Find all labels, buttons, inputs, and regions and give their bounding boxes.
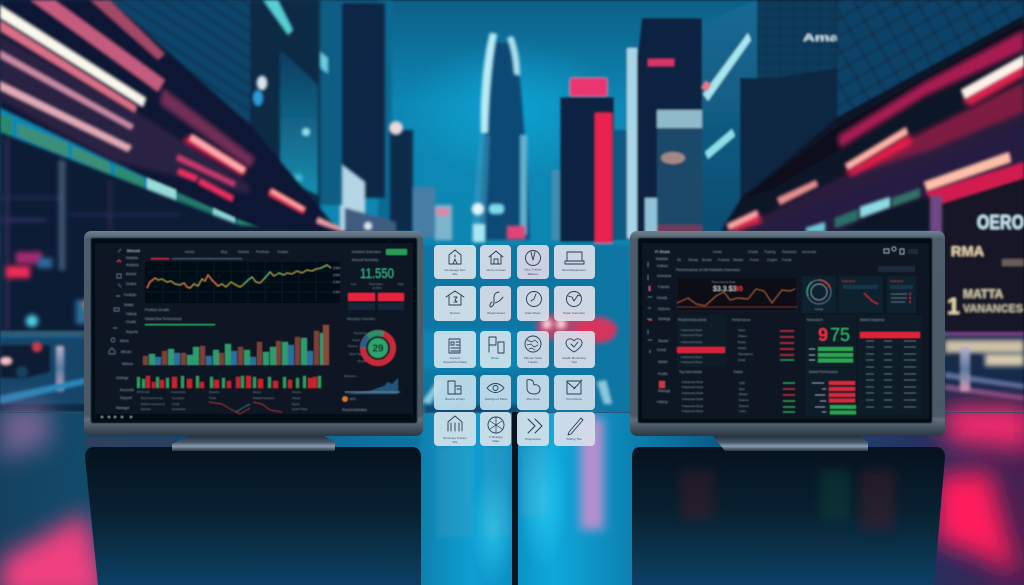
icon tile: clock pin [517, 245, 549, 279]
left panel heading: Market Bar Performance [145, 317, 182, 321]
left lower data tables: Market Indicators [253, 396, 275, 400]
right line chart panel: Price Volume Data [712, 280, 736, 284]
right top navigation: Crypto [767, 258, 777, 262]
right table panel: positions: Instrument Stock [681, 360, 703, 364]
left lower data tables: BTC/USD [137, 390, 149, 394]
right table panel: holdings: Credit [738, 358, 746, 362]
left far towers [340, 0, 452, 240]
green sign band [0, 114, 262, 228]
right sidebar navigation: Profile [658, 372, 668, 376]
right table panel: holdings: Performance [732, 318, 750, 322]
left taskbar icons [101, 416, 132, 418]
icon tile: city home [434, 412, 476, 446]
icon tile: files: Review Library [445, 397, 465, 401]
left lower data tables: Quant Trade [292, 407, 308, 411]
right sidebar navigation: Details [657, 296, 668, 300]
right table panel: lower left: Top Instruments [679, 370, 702, 374]
icon tile: heart: Tool [571, 360, 577, 364]
right table panel: positions: Instrument Stock [681, 340, 703, 344]
left volume bar chart [137, 376, 321, 388]
icon tile: curved shape [517, 375, 549, 410]
right stand [712, 435, 868, 451]
icon tile: laptop: Board Equipment [562, 268, 586, 272]
icon tile: clock pin: Hour Tracker [524, 268, 542, 272]
left lower data tables: Derivatives [172, 407, 186, 411]
icon tile: check envelope: Proof Store [566, 397, 582, 401]
right table panel: lower middle: Options [739, 404, 749, 408]
right table panel: positions: Instrument Stock [681, 328, 703, 332]
left stand [172, 435, 335, 451]
right sidebar navigation: Fi Shark [655, 249, 670, 254]
right table panel: lower left: Instrument Stock [682, 404, 704, 408]
right table panel: lower left: Instrument Stock [682, 409, 704, 413]
streak: light pink [0, 81, 132, 152]
left storefront [0, 132, 350, 335]
right headline value panel: Momentum [807, 318, 823, 322]
icon tile: phone and page: Photo [491, 356, 499, 360]
right table panel: holdings: Alternatives [738, 352, 753, 356]
illuminated storefront sign: VANANCES [963, 303, 1023, 315]
left sidebar navigation: History [126, 312, 137, 316]
icon tile: knowledge globe: Tracker [528, 360, 538, 364]
left sidebar navigation: Support [120, 396, 132, 400]
left upper building [110, 0, 250, 125]
left screen [91, 238, 417, 423]
red lit tower [552, 78, 627, 243]
right table panel: lower left: Instrument Stock [682, 391, 704, 395]
right monitor reflection [632, 447, 945, 585]
left top navigation: Market [238, 250, 249, 254]
right table panel: positions: Instrument Stock [681, 333, 703, 337]
right top mini panels: Highlights [890, 279, 904, 283]
right top navigation: All [677, 258, 681, 262]
icon tile: eye: Settings of Place [485, 397, 508, 401]
left mini area chart: Allocation [344, 374, 357, 378]
left donut chart: Crypto [352, 338, 361, 342]
right table panel: holdings [730, 315, 802, 367]
icon tile: brain globe: Maps [492, 439, 500, 443]
icon tile: home person: Homepage Item [444, 268, 466, 272]
icon tile: house with arrow [434, 286, 476, 321]
left facade with neon streaks [0, 0, 342, 232]
left mini area chart: BTC [350, 397, 357, 401]
left monitor reflection [85, 447, 421, 585]
left headline value: 11.550 [360, 265, 394, 281]
right table panel: lower left: Instrument Stock [682, 397, 704, 401]
icon tile: house with arrow: Review [450, 311, 461, 315]
left account panel: Total Value [369, 282, 383, 286]
right sidebar navigation: Credit [657, 348, 666, 352]
central glass tower [472, 33, 530, 242]
right top navigation: Charts [748, 250, 758, 254]
left sidebar navigation: Charts [126, 320, 136, 324]
left lower data tables: Credit [172, 402, 180, 406]
icon tile grid [434, 245, 595, 446]
red neon tubes [183, 135, 246, 176]
right glass building: Amal [803, 33, 843, 44]
right facade with neon streaks [720, 0, 1024, 232]
right gauge panel: Gauge [815, 307, 824, 311]
right screen [638, 238, 932, 423]
right line chart panel: 30 [735, 286, 743, 293]
right sidebar navigation: Wallet [658, 360, 667, 364]
icon tile: clock [517, 286, 549, 321]
right table panel: lower middle: USD [739, 381, 745, 385]
right top navigation: Accounts [802, 250, 816, 254]
right table panel: holdings: Equity [738, 340, 746, 344]
illuminated storefront sign [924, 152, 1024, 420]
right table panel: lower left: Instrument Stock [682, 380, 704, 384]
left pink sheen [0, 512, 110, 585]
icon tile: globe shield: Paper Summary [563, 311, 585, 315]
right table panel: lower middle: Margin [739, 392, 748, 396]
streak: pale pink [0, 50, 134, 130]
left donut chart: 29 [372, 344, 384, 354]
left account panel: High [398, 282, 404, 286]
right top navigation: Funds [782, 258, 792, 262]
left sidebar navigation: Portfolio [124, 293, 137, 297]
right side table [858, 315, 922, 415]
left buy button [386, 249, 407, 255]
right table panel: lower middle: Futures [739, 398, 749, 402]
right sidebar navigation: Indices [657, 264, 668, 268]
right top mini panels: Highlights [842, 279, 856, 283]
right horizontal bar chart: Market Performance [809, 370, 838, 374]
right highlighted row [677, 347, 725, 353]
right sidebar navigation: Options [658, 307, 670, 311]
right table panel: holdings: Shares [738, 334, 747, 338]
icon tile: city home: Summary Tracker [443, 436, 467, 440]
right top navigation: Forex [750, 258, 759, 262]
right page heading: Performance of US Markets Overview [676, 268, 740, 272]
right sidebar navigation: Markets [656, 257, 668, 261]
right line chart panel: $3.3.$3 [713, 286, 736, 293]
left sidebar navigation: Metrics [122, 362, 133, 366]
icon tile: pencil: Writing Tips [566, 437, 582, 441]
left account panel: Account Summary [352, 258, 378, 262]
right table panel: holdings: Asset [738, 328, 745, 332]
left lower data tables: Quantity [209, 390, 220, 394]
icon tile: chevrons [517, 412, 549, 446]
left top navigation: Trades [277, 250, 288, 254]
left account panel: Allocation Overview [347, 317, 376, 321]
left lower data tables: Margin [292, 396, 301, 400]
icon tile: files [434, 375, 476, 410]
icon tile: home person: Site [452, 272, 458, 276]
right top navigation: Metals [733, 258, 743, 262]
right headline value panel: 9 [818, 325, 828, 345]
right sidebar navigation [647, 249, 672, 404]
icon tile: knowledge globe [517, 331, 549, 368]
left lower data tables: Market Instruments [141, 402, 166, 406]
left lower data tables: Volume [292, 390, 302, 394]
left sidebar navigation: Bitcoin [121, 350, 131, 354]
left account panel [347, 249, 407, 321]
icon tile: curved shape: Plus Area [527, 397, 540, 401]
left top navigation: Markets Overview [352, 250, 381, 254]
left sidebar navigation [109, 248, 140, 410]
right table panel: lower left: Instrument Stock [682, 385, 704, 389]
right side table: Market Snapshot [860, 318, 884, 322]
icon tile: stethoscope curve: Weight Asset [487, 311, 505, 315]
icon tile: heart [554, 331, 595, 368]
streak: white [0, 5, 146, 107]
left sidebar navigation: Reports [126, 330, 138, 334]
left price line chart: 1,550 [333, 266, 340, 270]
icon tile: heart: Health Monitoring [562, 356, 586, 360]
right top navigation: Stocks [688, 258, 698, 262]
icon tile: document [434, 331, 476, 368]
left sidebar navigation: Assets [126, 272, 136, 276]
left bezel [84, 231, 423, 436]
right table panel: lower left [677, 368, 727, 416]
left sidebar navigation: Accounts [120, 388, 134, 392]
icon tile: globe shield [554, 286, 595, 321]
left sidebar navigation: Markets [126, 256, 138, 260]
right top navigation: Home [713, 250, 722, 254]
left panel heading [145, 308, 182, 321]
left sidebar navigation: Wallet [124, 303, 133, 307]
icon tile: document: Census [450, 356, 461, 360]
right glass building [701, 0, 843, 240]
right monitor [630, 231, 945, 451]
left top navigation: Portfolio [256, 250, 269, 254]
right sidebar navigation: Futures [658, 285, 670, 289]
right horizontal bar chart [805, 368, 856, 416]
right line chart panel [677, 277, 797, 311]
left top navigation [185, 250, 381, 254]
icon tile: chevrons: Progression [525, 437, 541, 441]
background: neon city skyline [0, 0, 1024, 420]
icon tile: stethoscope curve [480, 286, 511, 321]
left account panel: Low [351, 282, 357, 286]
street, cars, rails and road markings [0, 245, 1024, 413]
streak: pink under white [0, 20, 137, 113]
illuminated storefront sign: MATTA [963, 287, 1004, 301]
left lower data tables: Bond Instruments [141, 396, 164, 400]
right table panel: lower middle: Spot [739, 387, 745, 391]
icon tile: pencil [554, 412, 595, 446]
icon tile: eye [480, 375, 511, 410]
right pink sheen [945, 405, 1024, 450]
icon tile: brain globe: 2 Strategy [489, 435, 503, 439]
illuminated storefront sign: 1 [947, 293, 960, 319]
icon tile: document: Researched Data [443, 360, 467, 364]
right headline value panel [805, 315, 856, 367]
icon tile: laptop [554, 245, 595, 279]
right table panel: holdings: Metals [738, 346, 747, 350]
right table panel: positions [677, 315, 727, 367]
icon tile: house: Home to Asset [486, 268, 506, 272]
left price line chart: 1,450 [333, 280, 340, 284]
left donut chart: Stock Tips [349, 352, 363, 356]
right table panel: lower middle: Index [739, 409, 746, 413]
right top mini panels [839, 276, 916, 313]
left sell buttons [348, 293, 404, 301]
right top navigation: Bonds [702, 258, 712, 262]
left account panel: +0.96% [372, 286, 382, 290]
left sidebar navigation: Manager [116, 406, 130, 410]
icon tile: brain globe [480, 412, 511, 446]
left lower data tables: Trade [209, 396, 217, 400]
right sidebar navigation: Stocks [658, 339, 668, 343]
icon tile: check envelope [554, 375, 595, 410]
left monitor [84, 231, 423, 451]
left sidebar navigation: Orders [126, 282, 137, 286]
left top navigation: Buy [221, 250, 227, 254]
right top navigation: Research [782, 250, 797, 254]
right top navigation: Trading [764, 250, 775, 254]
streak: thin pink [90, 0, 165, 60]
left mini area chart: Recent Activities [342, 408, 367, 412]
illuminated storefront sign: RMA [951, 243, 984, 259]
left sidebar navigation: Analysis [126, 263, 139, 267]
right table panel: lower middle [730, 368, 802, 416]
red neon tubes right [962, 62, 1024, 106]
left streak band base [0, 0, 340, 232]
left lower data tables: Company [172, 396, 185, 400]
left lower data tables [137, 390, 308, 414]
left top navigation: Home [185, 250, 195, 254]
left price line chart [145, 258, 340, 303]
right top navigation: Futures [718, 258, 730, 262]
right mid-distance towers [627, 18, 702, 240]
right sidebar navigation: Manage [658, 389, 670, 393]
left price line chart: 1,400 [333, 290, 340, 294]
left lower data tables: Report [253, 390, 262, 394]
icon tile: knowledge globe: Planner Store [524, 356, 542, 360]
right table panel: lower middle: Trades [733, 370, 743, 374]
right sidebar navigation: Overview [657, 274, 672, 278]
left price line chart: 1,500 [333, 273, 340, 277]
left donut chart [348, 331, 393, 363]
left main bar chart [143, 325, 329, 365]
right top navigation [677, 247, 918, 262]
glass table top [0, 405, 1024, 585]
streak: wide pink [30, 0, 165, 92]
icon tile: house [480, 245, 511, 279]
icon tile: phone and page [480, 331, 511, 368]
right table panel: positions: Instrument Stock [681, 355, 703, 359]
left mini area chart [342, 374, 400, 412]
right sidebar navigation: History [657, 400, 668, 404]
right gauge panel [802, 276, 836, 313]
left donut chart: Futures [348, 344, 358, 348]
right bezel [630, 231, 945, 436]
left donut chart: Payments [354, 331, 367, 335]
icon tile: home person [434, 245, 476, 279]
left lower data tables: Equity [292, 402, 300, 406]
right headline value panel: 75 [830, 325, 850, 345]
icon tile: city home: Site [452, 440, 458, 444]
left sidebar navigation: Bitread [127, 248, 140, 253]
left lower data tables: Instruments [171, 390, 186, 394]
right table panel: positions: Related Instruments [678, 318, 707, 322]
left sidebar navigation: Alerts [120, 339, 129, 343]
left lower data tables: Equities [141, 407, 152, 411]
icon tile: clock pin: Balance [528, 272, 539, 276]
icon tile: clock: Data Share [525, 311, 541, 315]
left donut chart: Bonds [358, 359, 367, 363]
left sidebar navigation: Settings [116, 376, 129, 380]
right sidebar navigation: Settings [658, 317, 671, 321]
left panel heading: Portfolio Growth [145, 308, 169, 312]
